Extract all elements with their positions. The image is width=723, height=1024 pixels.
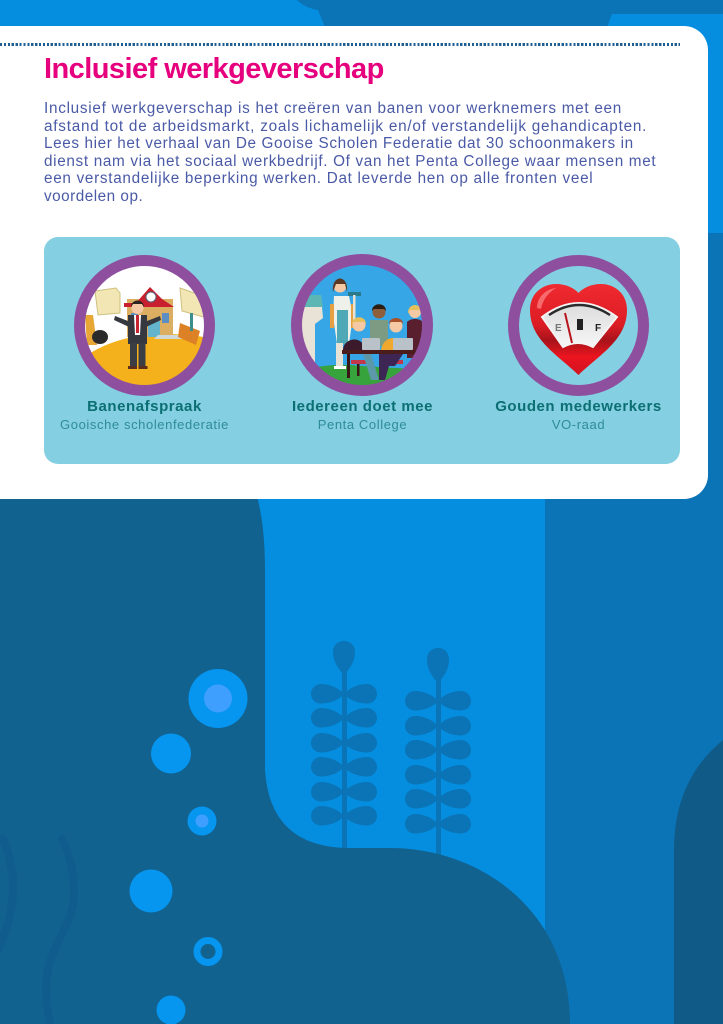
gauge xyxy=(542,303,617,347)
caption: Iedereen doet mee xyxy=(292,398,433,432)
caption: Gouden medewerkers: VO-raad xyxy=(552,417,605,432)
icon: heart fuel gauge circle: F xyxy=(595,323,601,334)
plant right xyxy=(405,648,471,856)
panel: white card xyxy=(0,26,708,499)
intro text block: afstand tot de arbeidsmarkt, zoals lichamelijk en/of verstandelijk gehandicapten. xyxy=(44,118,647,135)
foreground hill xyxy=(0,770,570,1024)
caption: Banenafspraak xyxy=(60,398,229,432)
intro text block: voordelen op. xyxy=(44,188,143,205)
dotted line xyxy=(0,43,680,46)
bubbles xyxy=(130,669,248,1024)
caption: Gouden medewerkers xyxy=(495,398,662,432)
intro text block: dienst nam via het sociaal werkbedrijf. Of van het Penta College waar mensen met xyxy=(44,153,656,170)
plant left xyxy=(311,641,377,850)
title: Inclusief werkgeverschap xyxy=(44,53,384,85)
intro text block: Inclusief werkgeverschap is het creëren van banen voor werknemers met een xyxy=(44,100,622,117)
caption: Banenafspraak: Gooische scholenfederatie xyxy=(60,417,229,432)
intro text block: Lees hier het verhaal van De Gooise Scholen Federatie dat 30 schoonmakers in xyxy=(44,135,634,152)
heart xyxy=(530,284,627,375)
icon: banenafspraak circle xyxy=(74,255,215,396)
intro text block xyxy=(44,100,656,205)
icon: heart fuel gauge circle xyxy=(508,255,649,396)
intro text block: een verstandelijke beperking werken. Dat leverde hen op alle fronten veel xyxy=(44,170,593,187)
icon: iedereen doet mee circle xyxy=(291,254,433,396)
seaweed wave lines xyxy=(0,839,74,1024)
caption: Iedereen doet mee: Penta College xyxy=(318,417,407,432)
caption: Gouden medewerkers: Gouden medewerkers xyxy=(495,398,662,415)
icon: heart fuel gauge circle: E xyxy=(555,323,562,334)
panel: stories xyxy=(44,237,680,464)
caption: Iedereen doet mee: Iedereen doet mee xyxy=(292,398,433,415)
caption: Banenafspraak: Banenafspraak xyxy=(87,398,202,415)
